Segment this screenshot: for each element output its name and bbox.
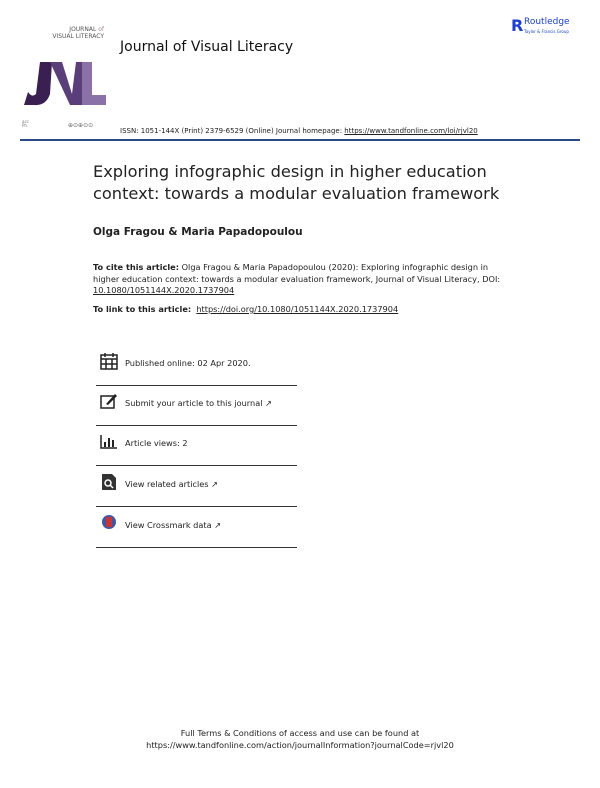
article title <box>93 162 500 203</box>
footer: Full Terms & Conditions of access and use can be found at <box>181 728 419 738</box>
journal cover logo: JOURNAL of <box>69 26 104 33</box>
publisher logo <box>511 16 570 35</box>
row: related <box>96 474 297 507</box>
row: crossmark: View Crossmark data ↗ <box>125 520 221 530</box>
journal title: Journal of Visual Literacy <box>120 39 293 55</box>
row: views: Article views: 2 <box>125 438 188 448</box>
row: published <box>96 353 297 386</box>
issn line: ISSN: 1051-144X (Print) 2379-6529 (Online) Journal homepage: https://www.tandfonline.com/loi/rjvl20 <box>120 127 478 135</box>
row: submit <box>96 394 297 426</box>
row: views <box>96 435 297 466</box>
row: crossmark <box>96 515 297 548</box>
citation: 10.1080/1051144X.2020.1737904 <box>93 285 234 295</box>
publisher logo: Taylor & Francis Group <box>524 29 569 34</box>
row: published: Published online: 02 Apr 2020. <box>125 358 251 368</box>
journal cover logo: VISUAL LITERACY <box>52 33 104 40</box>
journal cover logo <box>22 26 106 129</box>
citation: higher education context: towards a modular evaluation framework, Journal of Visual Literacy, DOI: <box>93 274 500 284</box>
journal cover logo: acc <box>22 119 29 124</box>
row: submit: Submit your article to this journal ↗ <box>125 398 272 408</box>
article title: Exploring infographic design in higher education <box>93 162 487 181</box>
article title: context: towards a modular evaluation framework <box>93 184 499 203</box>
journal cover logo: ⊕⊙⊕⊙⊙ <box>68 122 93 129</box>
journal cover logo: Ph. <box>22 123 28 128</box>
footer <box>146 728 454 750</box>
link: To link to this article: https://doi.org/10.1080/1051144X.2020.1737904 <box>93 304 398 314</box>
citation: To cite this article: Olga Fragou & Maria Papadopoulou (2020): Exploring infographic design in <box>93 262 488 272</box>
publisher logo: R <box>511 16 523 35</box>
row: related: View related articles ↗ <box>125 479 218 489</box>
publisher logo: Routledge <box>524 17 570 27</box>
citation <box>93 262 500 295</box>
footer: https://www.tandfonline.com/action/journalInformation?journalCode=rjvl20 <box>146 740 454 750</box>
authors: Olga Fragou & Maria Papadopoulou <box>93 226 303 238</box>
